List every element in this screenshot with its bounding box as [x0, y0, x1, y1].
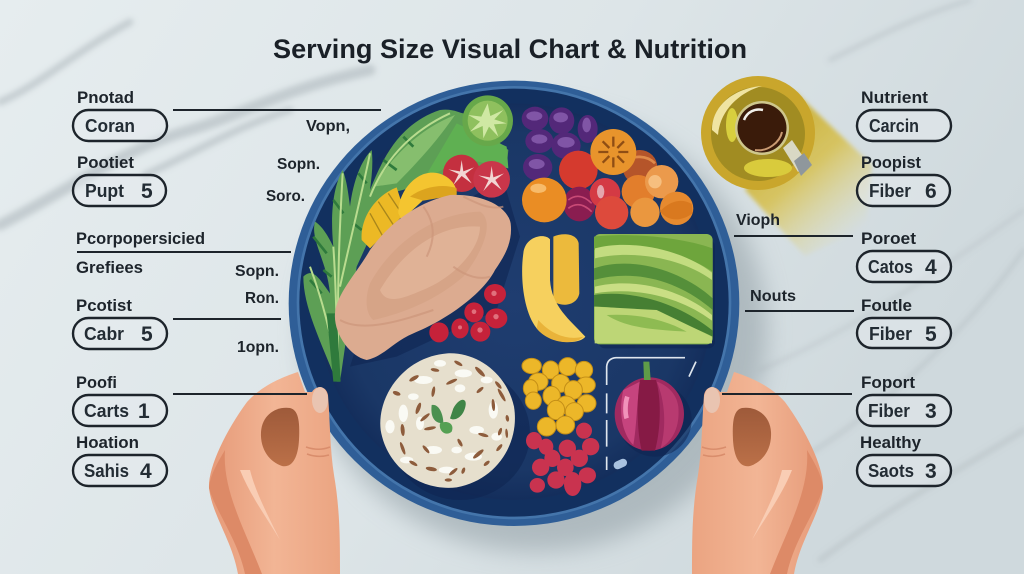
- plate side labels: [235, 118, 796, 356]
- icon: olive oil cup: [701, 76, 872, 256]
- right label: Foport: Foport: [861, 374, 916, 392]
- plate side labels: Soro.: [266, 188, 305, 205]
- left label: Poofi: 1: [138, 400, 150, 423]
- palm hollow: [261, 408, 299, 466]
- plate: [289, 81, 739, 526]
- left label: Pcotist: [73, 297, 167, 349]
- plate side labels: Ron.: [245, 290, 279, 307]
- right label: Poroet: [857, 230, 951, 282]
- right hand: [692, 372, 823, 574]
- left label: Pcotist: Pcotist: [76, 297, 133, 315]
- banana slices: [522, 234, 585, 342]
- right label: Poopist: Poopist: [861, 154, 921, 172]
- left label: Pootiet: Pootiet: [77, 154, 135, 172]
- radishes: [443, 155, 510, 198]
- title: Serving Size Visual Chart & Nutrition: [273, 34, 747, 64]
- kiwi: [462, 95, 513, 146]
- right label: Healthy: [857, 434, 951, 486]
- right label: Healthy: Saots: [868, 461, 914, 481]
- left label: Pcorpopersicied: [76, 230, 205, 277]
- grapes: [522, 107, 598, 181]
- left label: Pcotist: Cabr: [84, 324, 124, 344]
- right label: Poopist: Fiber: [869, 181, 911, 201]
- greens: [303, 110, 508, 382]
- plate side labels: Vopn,: [306, 118, 350, 135]
- right label: Foutle: Fiber: [869, 324, 912, 344]
- left label: Poofi: Carts: [84, 401, 129, 421]
- left label: Pnotad: Coran: [85, 116, 135, 136]
- left label: Hoation: Sahis: [84, 461, 129, 481]
- pomegranate seeds: [526, 423, 599, 496]
- left label: Hoation: [73, 434, 167, 486]
- left label: Pnotad: [73, 89, 167, 141]
- left label: Pootiet: 5: [141, 180, 153, 203]
- food shadows: [350, 180, 715, 500]
- yellow squash: [362, 173, 457, 248]
- left label: Pootiet: [73, 154, 166, 206]
- left label: Pcorpopersicied: Grefiees: [76, 259, 143, 277]
- right label: Poopist: [857, 154, 950, 206]
- plate side labels: Nouts: [750, 288, 796, 305]
- left label: Hoation: 4: [140, 460, 152, 483]
- left label: Poofi: [73, 374, 167, 426]
- right label: Foutle: 5: [925, 323, 937, 346]
- right label: Poroet: 4: [925, 256, 937, 279]
- left label: Pnotad: Pnotad: [77, 89, 134, 107]
- right label: Nutrient: [857, 89, 951, 141]
- chicken breast: [335, 195, 511, 360]
- right label: Poroet: Poroet: [861, 230, 917, 248]
- left label: Pootiet: Pupt: [85, 181, 124, 201]
- plate shadow: [303, 108, 767, 552]
- right label: Foport: 3: [925, 400, 937, 423]
- palm hollow right: [733, 408, 771, 466]
- right label: Healthy: 3: [925, 460, 937, 483]
- left label: Pcorpopersicied: Pcorpopersicied: [76, 230, 205, 248]
- right label: Poroet: Catos: [868, 257, 913, 277]
- thumbnail right: [704, 387, 720, 413]
- rice mound: [380, 353, 515, 488]
- purple fig and tray marks: [607, 358, 696, 471]
- left label: Hoation: Hoation: [76, 434, 139, 452]
- plate side labels: Sopn.: [277, 156, 320, 173]
- right label: Foutle: Foutle: [861, 297, 912, 315]
- leader lines: [77, 110, 854, 394]
- right label: Nutrient: Carcin: [869, 116, 919, 136]
- right label: Nutrient: Nutrient: [861, 89, 929, 107]
- left label: Pcotist: 5: [141, 323, 153, 346]
- plate side labels: Vioph: [736, 212, 780, 229]
- right label: Healthy: Healthy: [860, 434, 922, 452]
- plate side labels: 1opn.: [237, 339, 279, 356]
- right label: Poopist: 6: [925, 180, 937, 203]
- left hand: [209, 372, 340, 574]
- avocado slices: [594, 234, 713, 344]
- mixed fruit cluster: [522, 129, 693, 229]
- right label: Foport: [857, 374, 951, 426]
- left label: Poofi: Poofi: [76, 374, 117, 392]
- thumbnail: [312, 387, 328, 413]
- corn kernels: [522, 358, 596, 436]
- right label: Foutle: [857, 297, 951, 348]
- plate side labels: Sopn.: [235, 263, 279, 280]
- right label: Foport: Fiber: [868, 401, 910, 421]
- red berries: [429, 284, 507, 342]
